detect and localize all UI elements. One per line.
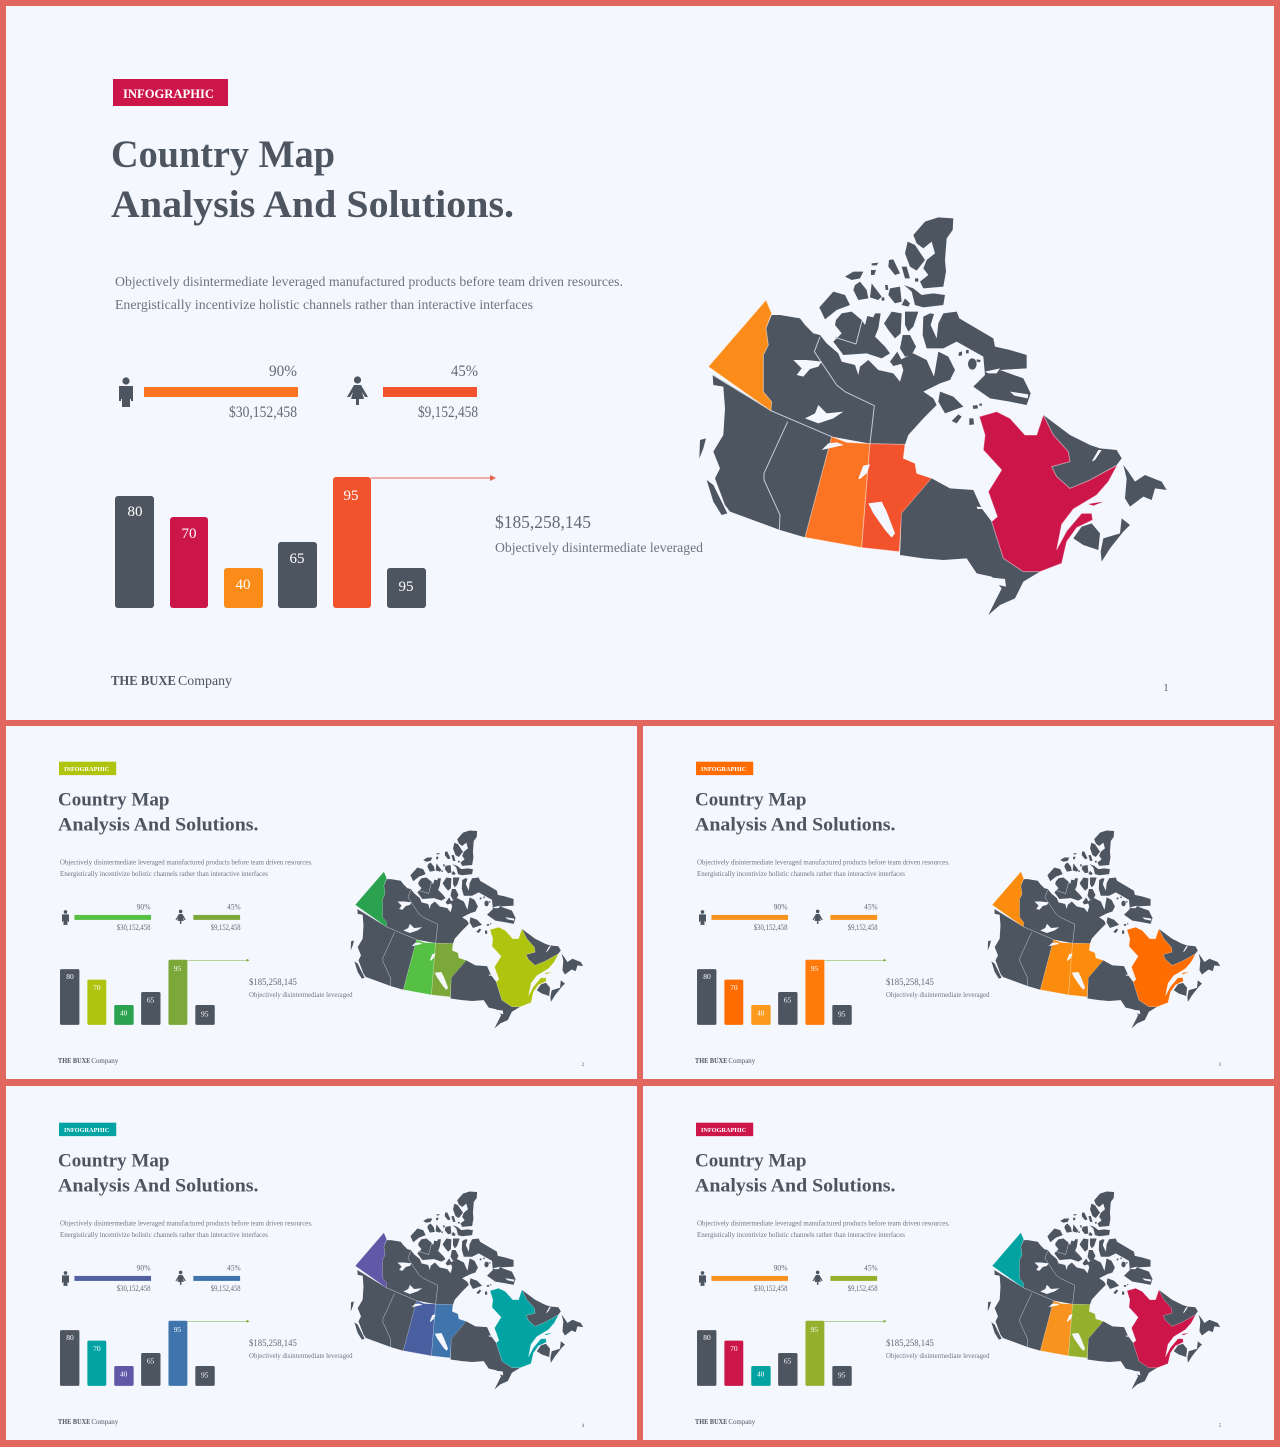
description xyxy=(697,1220,950,1239)
callout xyxy=(249,977,353,999)
icon: woman xyxy=(347,376,368,405)
footer xyxy=(695,1418,1222,1429)
footer: 4 xyxy=(582,1424,585,1429)
footer xyxy=(111,674,1168,694)
female stat bar: $9,152,458 xyxy=(848,1284,878,1293)
callout xyxy=(249,1338,353,1360)
footer: Company xyxy=(728,1418,756,1426)
callout xyxy=(886,977,990,999)
title: Analysis And Solutions. xyxy=(695,814,896,835)
female stat bar: $9,152,458 xyxy=(418,404,478,421)
description: Objectively disintermediate leveraged manufactured products before team driven resources. xyxy=(115,275,623,290)
bar chart: 70 xyxy=(93,983,101,992)
male stat bar: $30,152,458 xyxy=(117,1284,151,1293)
male stat bar: 90% xyxy=(137,1263,151,1272)
callout: $185,258,145 xyxy=(249,977,297,987)
title: Analysis And Solutions. xyxy=(58,1175,259,1196)
callout: $185,258,145 xyxy=(886,977,934,987)
map of Canada xyxy=(351,831,583,1028)
male stat bar: $30,152,458 xyxy=(229,404,297,421)
bar chart: 95 xyxy=(174,964,181,973)
male stat bar: $30,152,458 xyxy=(754,1284,788,1293)
description xyxy=(115,275,623,313)
callout: Objectively disintermediate leveraged xyxy=(495,541,703,556)
map of Canada xyxy=(699,217,1167,615)
female stat bar: 45% xyxy=(864,1263,878,1272)
badge: INFOGRAPHIC xyxy=(64,766,110,773)
bar chart: 70 xyxy=(730,1344,738,1353)
badge xyxy=(59,1123,116,1136)
panel: teal and blue slide xyxy=(58,1123,585,1429)
footer: THE BUXE xyxy=(111,674,176,689)
footer: Company xyxy=(91,1057,119,1065)
icon: man xyxy=(62,910,69,925)
icon: woman xyxy=(812,1271,823,1285)
icon: woman xyxy=(175,910,186,924)
bar chart: 80 xyxy=(703,1333,711,1342)
callout: $185,258,145 xyxy=(249,1338,297,1348)
bar chart: 95 xyxy=(344,488,358,504)
bar chart: 65 xyxy=(784,1356,792,1365)
description: Energistically incentivize holistic channels rather than interactive interfaces xyxy=(60,1231,268,1239)
badge xyxy=(696,1123,753,1136)
male stat bar xyxy=(711,1263,788,1293)
footer: THE BUXE xyxy=(695,1057,728,1065)
arrow xyxy=(824,1320,887,1323)
title: Analysis And Solutions. xyxy=(111,183,514,226)
female stat bar: 45% xyxy=(227,1263,241,1272)
female stat bar: $9,152,458 xyxy=(211,1284,241,1293)
bar chart: 95 xyxy=(398,579,414,595)
bar chart: 95 xyxy=(811,1325,818,1334)
bar chart: 70 xyxy=(93,1344,101,1353)
male stat bar xyxy=(74,1263,151,1293)
description xyxy=(60,859,313,878)
female stat bar: 45% xyxy=(451,363,478,380)
female stat bar xyxy=(383,363,478,421)
badge: INFOGRAPHIC xyxy=(123,86,214,101)
bar chart: 95 xyxy=(174,1325,181,1334)
footer: 3 xyxy=(1219,1063,1222,1068)
bar chart: 70 xyxy=(730,983,738,992)
footer: Company xyxy=(728,1057,756,1065)
map of Canada xyxy=(988,1192,1220,1389)
male stat bar: 90% xyxy=(269,363,297,380)
male stat bar: $30,152,458 xyxy=(117,923,151,932)
title xyxy=(111,133,514,226)
callout xyxy=(495,512,703,556)
badge: INFOGRAPHIC xyxy=(701,1127,747,1134)
callout: $185,258,145 xyxy=(886,1338,934,1348)
description: Objectively disintermediate leveraged manufactured products before team driven resources. xyxy=(697,859,950,867)
footer: 1 xyxy=(1164,683,1168,694)
description xyxy=(697,859,950,878)
bar chart: 95 xyxy=(201,1009,209,1018)
male stat bar xyxy=(711,902,788,932)
description: Energistically incentivize holistic channels rather than interactive interfaces xyxy=(60,870,268,878)
female stat bar xyxy=(193,1263,241,1293)
title: Analysis And Solutions. xyxy=(695,1175,896,1196)
bar chart: 40 xyxy=(120,1008,128,1017)
map of Canada xyxy=(988,831,1220,1028)
footer xyxy=(58,1418,585,1429)
description: Objectively disintermediate leveraged manufactured products before team driven resources. xyxy=(60,1220,313,1228)
bar chart: 40 xyxy=(757,1008,765,1017)
title xyxy=(695,1150,896,1196)
badge xyxy=(59,762,116,775)
icon: man xyxy=(699,910,706,925)
footer: 5 xyxy=(1219,1424,1222,1429)
footer: Company xyxy=(178,674,232,689)
bar chart: 95 xyxy=(838,1009,846,1018)
callout: Objectively disintermediate leveraged xyxy=(886,991,990,999)
description: Objectively disintermediate leveraged manufactured products before team driven resources. xyxy=(60,859,313,867)
title: Country Map xyxy=(111,133,335,176)
female stat bar xyxy=(193,902,241,932)
bar chart: 40 xyxy=(757,1369,765,1378)
description xyxy=(60,1220,313,1239)
arrow xyxy=(187,1320,250,1323)
callout: Objectively disintermediate leveraged xyxy=(886,1352,990,1360)
title: Analysis And Solutions. xyxy=(58,814,259,835)
bar chart: 95 xyxy=(838,1370,846,1379)
male stat bar: 90% xyxy=(774,902,788,911)
icon: man xyxy=(119,377,133,407)
badge xyxy=(113,79,228,106)
bar chart xyxy=(697,960,852,1025)
callout: $185,258,145 xyxy=(495,512,591,532)
description: Objectively disintermediate leveraged manufactured products before team driven resources. xyxy=(697,1220,950,1228)
callout: Objectively disintermediate leveraged xyxy=(249,1352,353,1360)
arrow xyxy=(187,959,250,962)
bar chart: 80 xyxy=(128,504,142,520)
panel: crimson and teal slide xyxy=(695,1123,1222,1429)
male stat bar xyxy=(144,363,298,421)
arrow xyxy=(371,475,496,481)
panel: main slide xyxy=(111,79,1168,694)
bar chart xyxy=(697,1321,852,1386)
male stat bar: $30,152,458 xyxy=(754,923,788,932)
bar chart: 80 xyxy=(703,972,711,981)
title: Country Map xyxy=(58,789,169,810)
bar chart: 65 xyxy=(784,995,792,1004)
map of Canada xyxy=(351,1192,583,1389)
panel: green slide xyxy=(58,762,585,1068)
footer xyxy=(695,1057,1222,1068)
bar chart: 40 xyxy=(236,577,250,593)
footer: 2 xyxy=(582,1063,585,1068)
title: Country Map xyxy=(58,1150,169,1171)
female stat bar: 45% xyxy=(864,902,878,911)
female stat bar xyxy=(830,1263,878,1293)
icon: woman xyxy=(812,910,823,924)
bar chart xyxy=(60,1321,215,1386)
badge: INFOGRAPHIC xyxy=(701,766,747,773)
description: Energistically incentivize holistic channels rather than interactive interfaces xyxy=(697,870,905,878)
icon: man xyxy=(699,1271,706,1286)
title xyxy=(58,1150,259,1196)
female stat bar: 45% xyxy=(227,902,241,911)
bar chart: 65 xyxy=(147,1356,155,1365)
bar chart: 80 xyxy=(66,1333,74,1342)
icon: man xyxy=(62,1271,69,1286)
male stat bar: 90% xyxy=(137,902,151,911)
female stat bar: $9,152,458 xyxy=(211,923,241,932)
title xyxy=(58,789,259,835)
bar chart: 65 xyxy=(290,551,304,567)
footer: Company xyxy=(91,1418,119,1426)
bar chart xyxy=(115,477,426,608)
footer: THE BUXE xyxy=(58,1418,91,1426)
arrow xyxy=(824,959,887,962)
bar chart: 95 xyxy=(201,1370,209,1379)
badge xyxy=(696,762,753,775)
footer: THE BUXE xyxy=(695,1418,728,1426)
title: Country Map xyxy=(695,1150,806,1171)
male stat bar: 90% xyxy=(774,1263,788,1272)
female stat bar: $9,152,458 xyxy=(848,923,878,932)
bar chart: 40 xyxy=(120,1369,128,1378)
bar chart: 70 xyxy=(182,526,196,542)
panel: orange slide xyxy=(695,762,1222,1068)
bar chart: 80 xyxy=(66,972,74,981)
title: Country Map xyxy=(695,789,806,810)
footer: THE BUXE xyxy=(58,1057,91,1065)
description: Energistically incentivize holistic channels rather than interactive interfaces xyxy=(697,1231,905,1239)
callout: Objectively disintermediate leveraged xyxy=(249,991,353,999)
bar chart xyxy=(60,960,215,1025)
badge: INFOGRAPHIC xyxy=(64,1127,110,1134)
title xyxy=(695,789,896,835)
icon: woman xyxy=(175,1271,186,1285)
bar chart: 95 xyxy=(811,964,818,973)
bar chart: 65 xyxy=(147,995,155,1004)
male stat bar xyxy=(74,902,151,932)
description: Energistically incentivize holistic channels rather than interactive interfaces xyxy=(115,298,533,313)
female stat bar xyxy=(830,902,878,932)
callout xyxy=(886,1338,990,1360)
footer xyxy=(58,1057,585,1068)
